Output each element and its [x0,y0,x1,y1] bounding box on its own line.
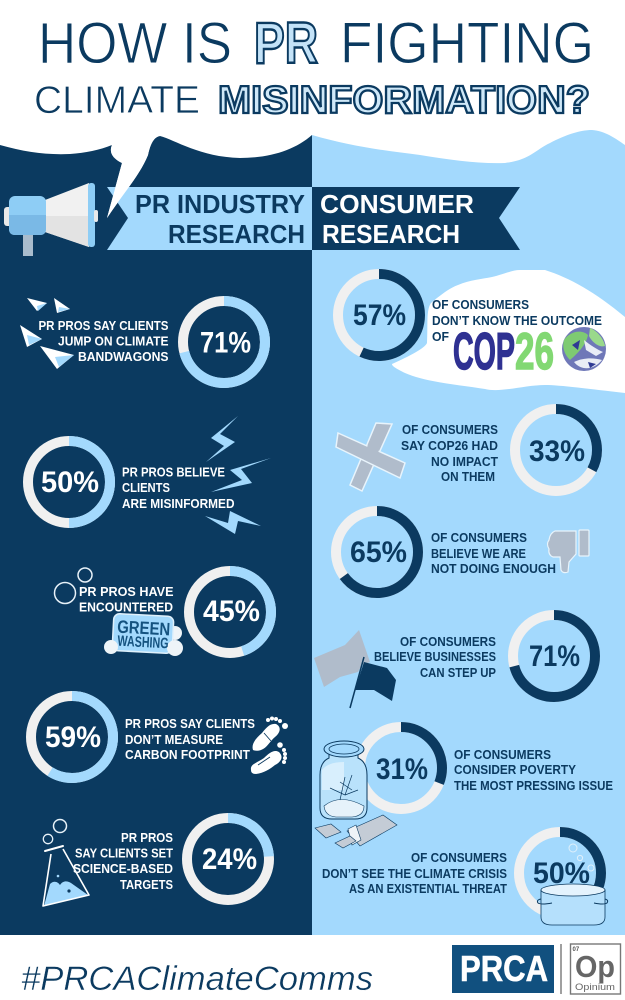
icon: green washing soap: GREEN [117,617,171,639]
text block: NOT DOING ENOUGH [431,562,556,576]
banner: PR industry research: PR INDUSTRY [135,189,305,219]
text block [322,851,507,896]
icon: soap bubbles [54,568,92,604]
donut: 50% [28,441,110,523]
donut: 59% [31,696,113,778]
icon: green washing soap [104,613,183,656]
stat: 59% do not measure carbon footprint [31,696,288,778]
text block: NO IMPACT [431,455,498,469]
text block: PR PROS HAVE [79,585,174,599]
panel: PR industry research background [0,135,312,935]
text block: OF CONSUMERS [454,748,551,762]
panel: consumer research background [312,130,625,935]
text block [374,635,496,680]
speech bubble tail [107,120,160,218]
white cloud [392,270,625,393]
stat: 65% not doing enough [336,511,589,593]
text block [79,585,174,615]
text block [454,748,613,793]
donut: 71% [513,615,595,697]
icon: paper planes [20,298,74,369]
text block: SAY COP26 HAD [401,439,498,453]
donut: 45%: 45% [203,595,260,628]
donut: 31%: 31% [376,753,428,786]
donut: 71%: 71% [529,640,580,673]
text block: PR PROS SAY CLIENTS [38,319,168,333]
text block: OF [432,330,449,344]
title: HOW IS [38,11,232,76]
icon: lightning bolts [205,416,271,534]
icon: crossed tape [336,423,405,491]
text block: CARBON FOOTPRINT [125,748,250,762]
donut: 31% [360,727,442,809]
stat: 50% clients misinformed [28,416,271,534]
donut: 33%: 33% [529,435,585,468]
banner: consumer research [312,187,520,250]
donut: 24% [187,818,269,900]
donut: 57% [338,274,420,356]
donut: 57%: 57% [353,299,406,332]
icon: flask [43,820,89,906]
icon: globe [562,327,606,371]
text block: CLIENTS [122,481,170,495]
logo: Opinium: 07 [572,947,580,953]
text block: BELIEVE WE ARE [431,547,526,561]
text block: CONSIDER POVERTY [454,763,577,777]
text block: SCIENCE-BASED [73,862,173,876]
title: CLIMATE [34,79,200,122]
text block: ON THEM [441,470,495,484]
text block: ARE MISINFORMED [122,497,234,511]
stat: 71% businesses can step up [314,615,595,708]
title: PR [254,11,318,76]
text block: OF CONSUMERS [411,851,507,865]
donut: 71%: 71% [200,326,251,360]
icon: thumbs down [548,530,589,573]
icon: green washing soap: WASHING [117,633,169,652]
logo: COP26: COP [453,323,515,381]
text block [401,423,498,484]
text block: DON’T KNOW THE OUTCOME [432,314,602,328]
icon: flags [314,630,396,708]
text block: PR PROS BELIEVE [122,466,225,480]
icon: bills and receipts [315,815,397,848]
text block: OF CONSUMERS [432,298,529,312]
text block [432,298,602,344]
logo: Opinium [561,944,620,994]
text block [122,466,234,511]
title: FIGHTING [340,11,594,76]
title: MISINFORMATION? [218,79,590,122]
donut: 59%: 59% [45,721,101,754]
stat: 33% COP26 had no impact [336,409,597,491]
stat: 57% do not know COP26 outcome [338,270,625,393]
text block: PR PROS SAY CLIENTS [125,717,255,731]
text block [125,717,255,762]
text block: BANDWAGONS [78,350,168,364]
banner: consumer research: RESEARCH [322,219,460,249]
donut: 65%: 65% [350,536,407,569]
donut: 24%: 24% [202,843,257,876]
text block: OF CONSUMERS [400,635,496,649]
logo: Opinium: Opinium [575,982,615,993]
icon: footprints [251,716,288,774]
banner: PR industry research [107,187,312,250]
donut: 65% [336,511,418,593]
text block [38,319,168,364]
stat: 24% set science-based targets [43,818,269,906]
logo: COP26: 26 [515,323,554,381]
icon: boiling pot [537,844,608,925]
text block: JUMP ON CLIMATE [58,334,168,348]
text block: TARGETS [120,878,173,892]
stat: 71% clients jump on bandwagons [20,298,265,383]
text block: ENCOUNTERED [79,601,173,615]
stat: 31% poverty most pressing [315,727,613,848]
donut: 33% [515,409,597,491]
icon: empty jar with spider web [320,741,367,819]
text block: CAN STEP UP [420,666,496,680]
banner: consumer research: CONSUMER [320,189,474,219]
donut: 71% [183,301,265,383]
text block: PR PROS [121,831,173,845]
text block: OF CONSUMERS [431,531,527,545]
banner: PR industry research: RESEARCH [168,219,305,249]
text block: BELIEVE BUSINESSES [374,650,496,664]
title [34,11,594,122]
text block: DON’T SEE THE CLIMATE CRISIS [322,867,507,881]
text block [431,531,556,576]
text block: DON’T MEASURE [125,733,223,747]
donut: 50%: 50% [533,857,590,890]
text block [73,831,173,892]
stat: 45% encountered greenwashing [54,568,271,656]
text block: SAY CLIENTS SET [75,847,173,861]
stat: 50% climate crisis not existential [322,832,608,925]
text block: THE MOST PRESSING ISSUE [454,779,613,793]
logo: Opinium: Op [575,949,615,984]
donut: 50% [519,832,601,914]
icon: megaphone [4,183,98,256]
donut: 50%: 50% [41,466,99,499]
logo: PRCA: PRCA [460,948,548,989]
hashtag: #PRCAClimateComms [21,960,373,998]
text block: OF CONSUMERS [402,423,498,437]
donut: 45% [189,571,271,653]
text block: AS AN EXISTENTIAL THREAT [349,882,507,896]
